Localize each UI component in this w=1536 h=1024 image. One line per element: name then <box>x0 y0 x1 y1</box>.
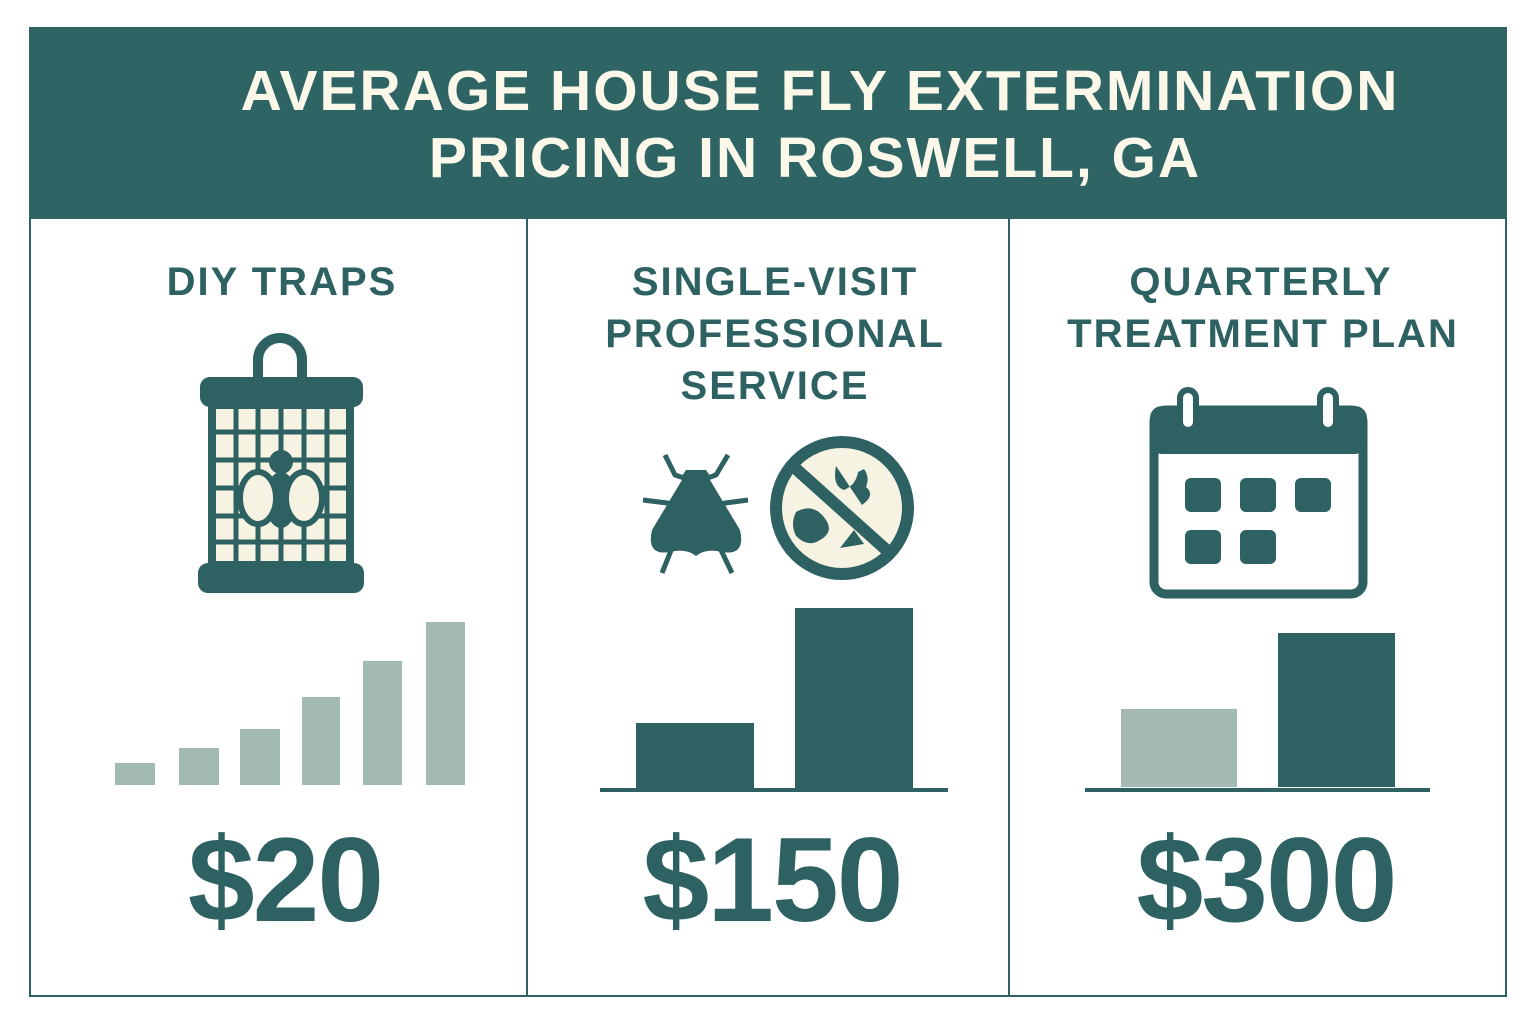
panel: DIY traps <box>115 260 465 947</box>
heading: single-visit professional service: SERVICE <box>681 364 869 408</box>
title <box>241 59 1399 190</box>
heading: DIY traps: DIY TRAPS <box>167 260 397 304</box>
title: AVERAGE HOUSE FLY EXTERMINATION <box>241 59 1399 123</box>
icon: fly trap cage <box>198 338 364 593</box>
panel: quarterly <box>1067 260 1459 947</box>
icon: calendar <box>1150 390 1367 594</box>
heading: quarterly treatment plan: QUARTERLY <box>1129 260 1393 304</box>
panel: single-visit <box>600 260 948 947</box>
title: PRICING IN ROSWELL, GA <box>429 126 1201 190</box>
heading: single-visit professional service <box>605 260 945 408</box>
icon: no bugs sign <box>776 442 908 574</box>
bar chart: single-visit <box>600 608 948 792</box>
header banner <box>29 27 1507 219</box>
price: $150: $150 <box>643 813 901 947</box>
heading: quarterly treatment plan <box>1067 260 1459 356</box>
heading: single-visit professional service: SINGLE-VISIT <box>632 260 918 304</box>
heading: quarterly treatment plan: TREATMENT PLAN <box>1067 312 1459 356</box>
price: $20: $20 <box>188 813 382 947</box>
bar chart: quarterly <box>1085 633 1430 792</box>
heading: single-visit professional service: PROFESSIONAL <box>605 312 945 356</box>
price: $300: $300 <box>1137 813 1395 947</box>
icon: fly <box>643 455 748 573</box>
bar chart: DIY <box>115 622 465 785</box>
